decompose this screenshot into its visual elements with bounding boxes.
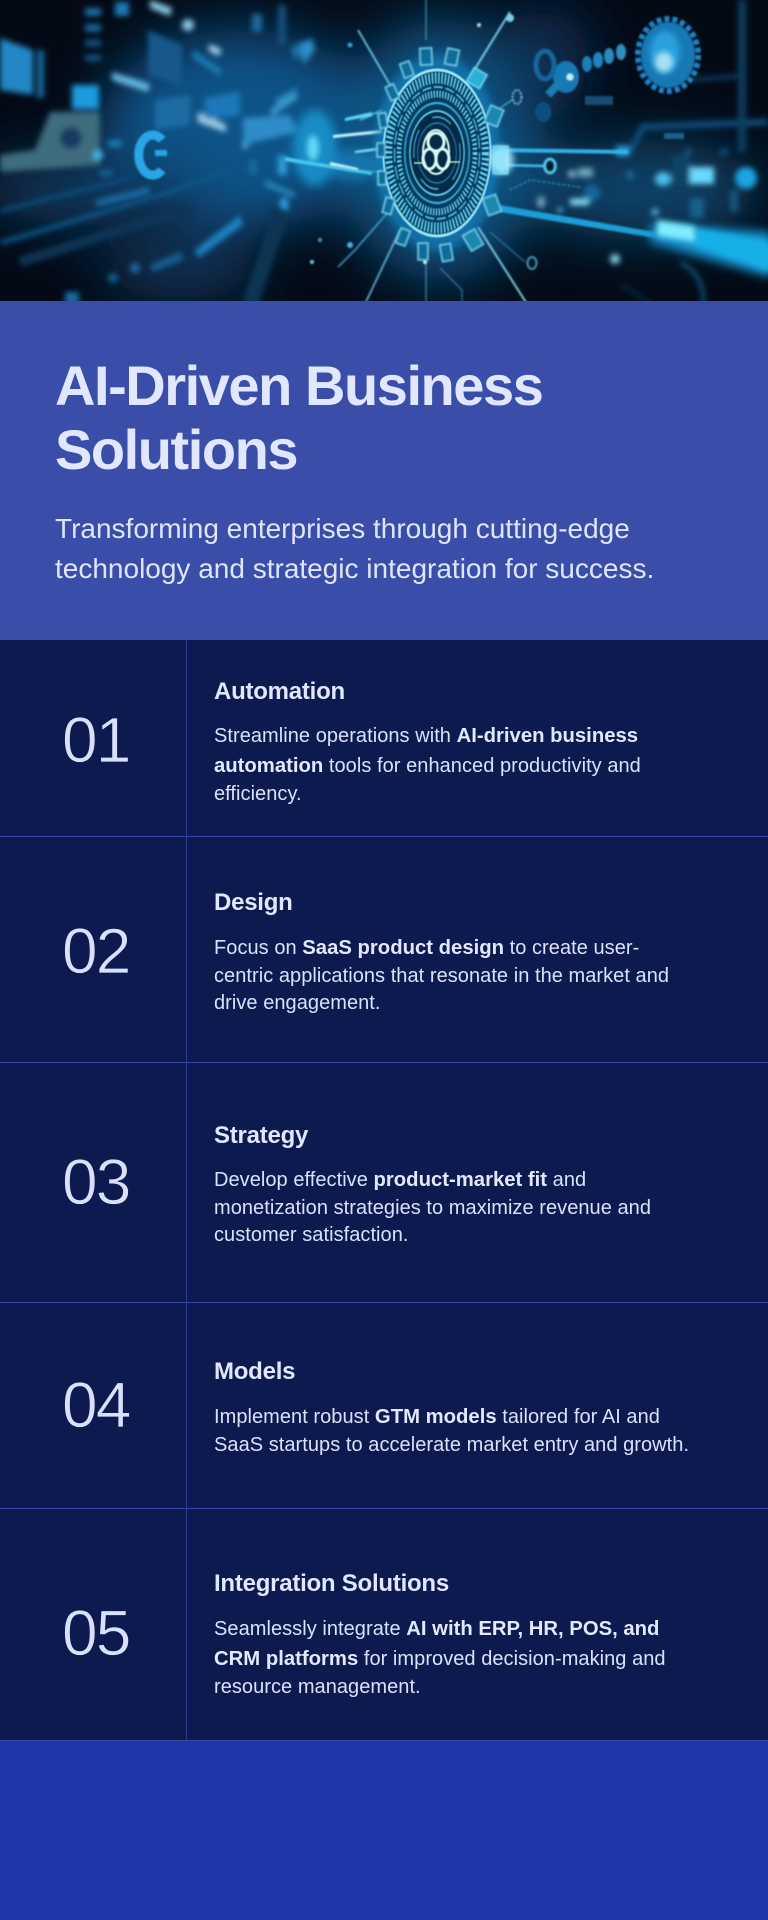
text: models description: SaaS startups to accelerate market entry and growth.: [214, 1434, 689, 1456]
title: Solutions: [55, 418, 297, 481]
ambient blue glow: [0, 10, 760, 300]
panel: row 03 strategy: [0, 1063, 768, 1303]
text: strategy description: [214, 1169, 651, 1246]
text: strategy description: customer satisfaction.: [214, 1224, 409, 1246]
text: models description: [214, 1406, 689, 1456]
hero image: technology disc with glowing circuits: [0, 0, 768, 301]
heading: models: Models: [214, 1358, 295, 1385]
horizontal beam and ring connector: [490, 90, 628, 269]
number 01: 01: [62, 704, 130, 776]
heading: design: Design: [214, 889, 293, 916]
text: integration description: resource management.: [214, 1676, 421, 1698]
title: [55, 354, 542, 481]
text: design description: Focus on SaaS product design to create user-: [214, 937, 639, 959]
chain of blurred capsules: [535, 44, 684, 139]
number cell 05: [0, 1509, 187, 1741]
number cell 04: [0, 1303, 187, 1509]
text: automation description: efficiency.: [214, 783, 302, 805]
right background circuits: [620, 0, 768, 304]
subtitle: [55, 513, 654, 584]
number cell 02: [0, 837, 187, 1063]
left light streaks: [285, 110, 382, 186]
title: AI-Driven Business: [55, 354, 542, 417]
panel: row 05 integration solutions: [0, 1509, 768, 1741]
heading: integration solutions: Integration Solutions: [214, 1570, 449, 1597]
central emblem: [414, 130, 460, 174]
text: design description: [214, 937, 669, 1014]
diagonal bright beam: [500, 205, 768, 278]
heading: strategy: Strategy: [214, 1122, 308, 1149]
panel: row 02 design: [0, 837, 768, 1063]
text: integration description: Seamlessly integrate AI with ERP, HR, POS, and: [214, 1618, 659, 1640]
text: strategy description: monetization strategies to maximize revenue and: [214, 1196, 651, 1218]
text: design description: drive engagement.: [214, 992, 381, 1014]
text: models description: Implement robust GTM models tailored for AI and: [214, 1406, 660, 1428]
number 03: 03: [62, 1146, 130, 1218]
right glowing lights: [537, 146, 757, 264]
number 05: 05: [62, 1597, 130, 1669]
left blurred data panels: [0, 0, 315, 304]
central circuit disc: [374, 55, 500, 251]
text: automation description: [214, 725, 641, 805]
gear icon: [638, 19, 698, 91]
number 04: 04: [62, 1369, 130, 1441]
text: design description: centric applications that resonate in the market and: [214, 965, 669, 987]
number 02: 02: [62, 915, 130, 987]
number cell 01: [0, 640, 187, 837]
panel: row 04 models: [0, 1303, 768, 1509]
subtitle: technology and strategic integration for success.: [55, 553, 654, 584]
text: automation description: automation tools for enhanced productivity and: [214, 755, 641, 777]
diagonal streak bands: [0, 170, 282, 304]
text: automation description: Streamline operations with AI-driven business: [214, 725, 638, 747]
panel: row 01 automation: [0, 640, 768, 837]
central scatter of circuit rays: [310, 0, 527, 304]
panel: header: [0, 301, 768, 640]
text: strategy description: Develop effective product-market fit and: [214, 1169, 586, 1191]
glow core at right tile: [490, 146, 514, 174]
subtitle: Transforming enterprises through cutting-edge: [55, 513, 630, 544]
text: integration description: [214, 1618, 666, 1698]
C-shaped glowing ring: [139, 135, 167, 175]
number cell 03: [0, 1063, 187, 1303]
disc satellite tiles: [377, 48, 508, 262]
heading: automation: Automation: [214, 678, 345, 705]
footer band: [0, 1741, 768, 1920]
text: integration description: CRM platforms for improved decision-making and: [214, 1648, 666, 1670]
